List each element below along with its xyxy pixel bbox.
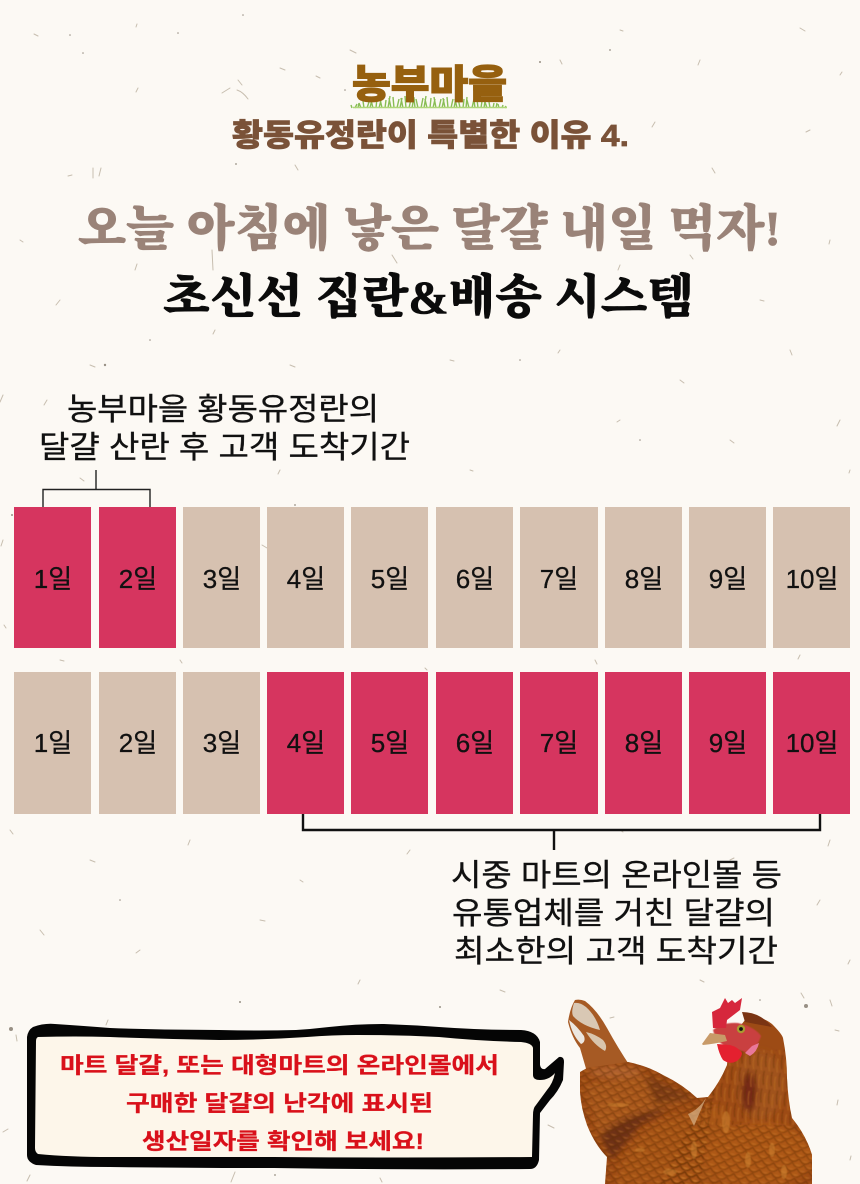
caption: market delivery period: 최소한의 고객 도착기간: [454, 934, 778, 969]
heading: line two: 초신선 집란&배송 시스템: [163, 272, 694, 324]
hen ear lobe: [745, 1043, 759, 1056]
hen body: [580, 1019, 812, 1184]
day 7: [520, 507, 598, 648]
day 5: [351, 672, 428, 814]
timeline row: farm eggs: [14, 507, 850, 648]
day 8: 8일: [625, 564, 663, 594]
header: brand logo: [351, 64, 507, 108]
day 6: 6일: [456, 564, 494, 594]
day 10: [773, 672, 850, 814]
day 8: 8일: [625, 728, 663, 758]
illustration: hen: [568, 998, 820, 1184]
bracket: market days: [303, 814, 820, 850]
hen beak: [702, 1033, 727, 1045]
day 1: [14, 507, 91, 648]
bubble text: 구매한 달걀의 난각에 표시된: [126, 1091, 433, 1116]
day 1: 1일: [34, 564, 72, 594]
day 3: [183, 672, 260, 814]
day 7: 7일: [540, 728, 578, 758]
hen wing shading: [585, 1051, 815, 1184]
day 6: 6일: [456, 728, 494, 758]
day 8: [605, 672, 682, 814]
day 3: 3일: [203, 728, 241, 758]
day 4: [267, 507, 344, 648]
day 4: 4일: [287, 564, 325, 594]
day 9: [689, 672, 766, 814]
day 2: [99, 672, 176, 814]
day 2: [99, 507, 176, 648]
day 5: 5일: [371, 564, 409, 594]
day 2: 2일: [119, 728, 157, 758]
hen head: [742, 1012, 772, 1027]
day 5: 5일: [371, 728, 409, 758]
subtitle: 황동유정란이 특별한 이유 4.: [232, 118, 629, 153]
bubble text: [60, 1053, 499, 1154]
day 5: [351, 507, 428, 648]
bubble interior: [35, 1035, 555, 1158]
hen tail: [568, 1000, 630, 1072]
day 4: 4일: [287, 728, 325, 758]
hen plumage base: [580, 1019, 812, 1184]
hen highlights: [607, 1103, 787, 1179]
hen wattle: [717, 1044, 742, 1063]
callout: speech bubble: [27, 1024, 564, 1169]
day 10: 10일: [786, 564, 838, 594]
day 4: [267, 672, 344, 814]
bubble outline: [27, 1024, 564, 1169]
day 9: 9일: [709, 564, 747, 594]
bubble text: 생산일자를 확인해 보세요!: [142, 1129, 424, 1154]
caption: farm delivery period: 달걀 산란 후 고객 도착기간: [39, 430, 410, 465]
hen neck ruff: [688, 1098, 706, 1126]
bubble text: 마트 달걀, 또는 대형마트의 온라인몰에서: [60, 1053, 499, 1078]
day 8: [605, 507, 682, 648]
day 9: 9일: [709, 728, 747, 758]
caption: market delivery period: 시중 마트의 온라인몰 등: [451, 858, 782, 893]
timeline row: market eggs: [14, 672, 850, 814]
caption: farm delivery period: [39, 392, 410, 465]
logo grass: [351, 96, 507, 108]
day 3: 3일: [203, 564, 241, 594]
day 7: [520, 672, 598, 814]
logo wordmark: 농부마을: [352, 64, 507, 107]
bracket: farm days: [43, 470, 150, 507]
hen comb: [712, 998, 742, 1028]
day 7: 7일: [540, 564, 578, 594]
hen face: [713, 1023, 761, 1053]
caption: farm delivery period: 농부마을 황동유정란의: [67, 392, 379, 427]
day 1: 1일: [34, 728, 72, 758]
caption: market delivery period: [451, 858, 782, 969]
day 6: [436, 672, 513, 814]
day 1: [14, 672, 91, 814]
day 10: 10일: [786, 728, 838, 758]
day 2: 2일: [119, 564, 157, 594]
hen feather texture: [575, 1060, 720, 1184]
day 6: [436, 507, 513, 648]
heading: line one: 오늘 아침에 낳은 달걀 내일 먹자!: [78, 201, 781, 256]
hen eye: [737, 1025, 745, 1033]
day 9: [689, 507, 766, 648]
day 3: [183, 507, 260, 648]
caption: market delivery period: 유통업체를 거친 달걀의: [452, 896, 775, 931]
day 10: [773, 507, 850, 648]
